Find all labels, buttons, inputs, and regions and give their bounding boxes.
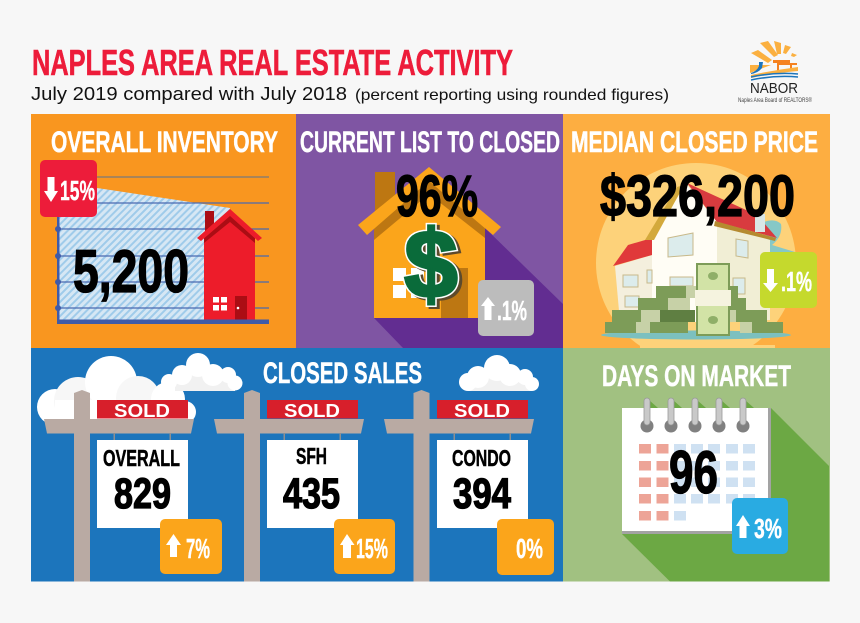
value: $326,200: $326,200 [600, 164, 795, 229]
sign: overall: SOLD [114, 401, 170, 421]
sign: overall: 7% [186, 533, 210, 564]
subtitle: (percent reporting using rounded figures) [355, 87, 669, 104]
sign: condo: SOLD [454, 401, 510, 421]
sign: SFH [214, 390, 395, 582]
panel: median closed price [563, 114, 830, 363]
badge: up .1%: .1% [497, 295, 527, 326]
sign: overall: OVERALL [103, 445, 180, 471]
badge: down 15%: 15% [60, 175, 95, 206]
icon: NABOR logo: Naples Area Board of REALTORS® [738, 97, 812, 104]
icon: large cloud [37, 356, 196, 425]
badge: up 3%: 3% [754, 513, 782, 544]
heading: OVERALL INVENTORY [51, 126, 278, 159]
icon: right cloud [459, 355, 539, 391]
icon: house and money [596, 163, 796, 363]
badge: up 3% [732, 498, 788, 554]
panel: current list to closed [296, 114, 563, 348]
badge: down .1% [760, 252, 817, 308]
sign: SFH: SOLD [284, 401, 340, 421]
heading: CLOSED SALES [263, 357, 422, 390]
subtitle: July 2019 compared with July 2018 [31, 84, 347, 104]
icon: NABOR logo: NABOR [750, 80, 798, 97]
value: 5,200: 5,200 [73, 238, 189, 305]
panel: days on market [563, 345, 830, 582]
title: NAPLES AREA REAL ESTATE ACTIVITY [32, 42, 513, 83]
badge: down 15% [40, 160, 97, 217]
icon: house with dollar sign [358, 167, 563, 348]
sign: condo: 394 [453, 470, 511, 518]
icon: house with dollar sign: $ [407, 213, 461, 320]
sign: SFH: SFH [296, 443, 327, 469]
icon: NABOR logo [738, 41, 812, 104]
icon: house with dollar sign: $ [404, 211, 458, 318]
icon: house with dollar sign: $ [404, 211, 458, 318]
panel: overall inventory [31, 114, 296, 348]
panel: closed sales [31, 348, 563, 582]
sign: condo: CONDO [452, 445, 511, 471]
sign: overall [44, 390, 222, 582]
sign: SFH: 15% [356, 533, 388, 564]
value: 96%: 96% [396, 164, 478, 229]
sign: condo: 0% [516, 533, 543, 564]
sign: overall: 829 [114, 470, 171, 518]
subtitle [31, 84, 669, 104]
icon: calendar [622, 398, 829, 582]
heading: CURRENT LIST TO CLOSED [300, 126, 560, 159]
icon: red house [197, 209, 262, 320]
badge: down .1%: .1% [781, 266, 812, 297]
badge: up .1% [478, 280, 534, 336]
value: 96: 96 [669, 439, 718, 506]
area chart [55, 177, 269, 324]
icon: small cloud [161, 353, 242, 391]
sign: SFH: 435 [283, 470, 340, 518]
sign: condo [384, 390, 554, 582]
